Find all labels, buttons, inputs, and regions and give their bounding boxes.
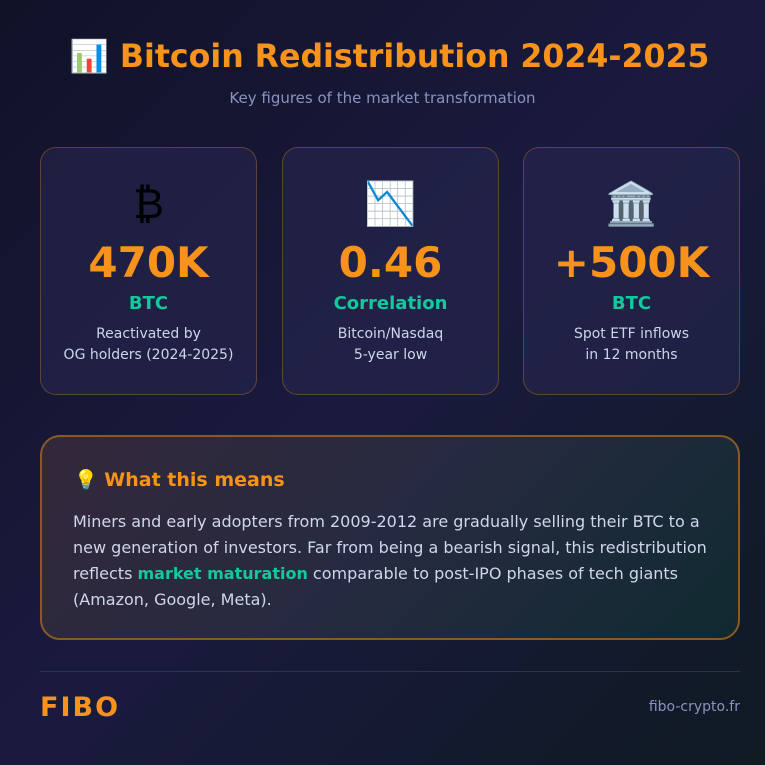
card: ETF inflows [523,147,740,395]
stat label: Correlation [334,293,447,314]
description: in 12 months [585,347,678,363]
description [64,326,233,363]
description: 5-year low [354,347,427,363]
url: fibo-crypto.fr [649,699,740,715]
icon: bank: 🏛️ [605,179,658,228]
description: Reactivated by [96,326,201,342]
description: Bitcoin/Nasdaq [338,326,443,342]
logo: FIBO [40,692,120,723]
icon: bitcoin: ₿ [133,179,164,228]
body text: Miners and early adopters from 2009-2012 are gradually selling their BTC to a new generation of investors. Far from being a bearish signal, this redistribution reflects market maturation comparable to post-IPO phases of tech giants (Amazon, Google, Meta). [73,512,707,609]
description [574,326,689,363]
subtitle: Key figures of the market transformation [229,89,536,107]
stat number: +500K [554,238,709,287]
stat number: 470K [88,238,209,287]
title: 📊 Bitcoin Redistribution 2024-2025 [70,39,709,75]
heading: 💡 What this means [74,469,285,491]
panel: what this means [40,435,740,640]
stat label: BTC [129,293,168,314]
card: correlation [282,147,499,395]
description: OG holders (2024-2025) [64,347,233,363]
description [338,326,443,363]
stat number: 0.46 [339,238,442,287]
stat label: BTC [612,293,651,314]
description: Spot ETF inflows [574,326,689,342]
card: reactivated BTC [40,147,257,395]
icon: chart down: 📉 [364,179,417,228]
